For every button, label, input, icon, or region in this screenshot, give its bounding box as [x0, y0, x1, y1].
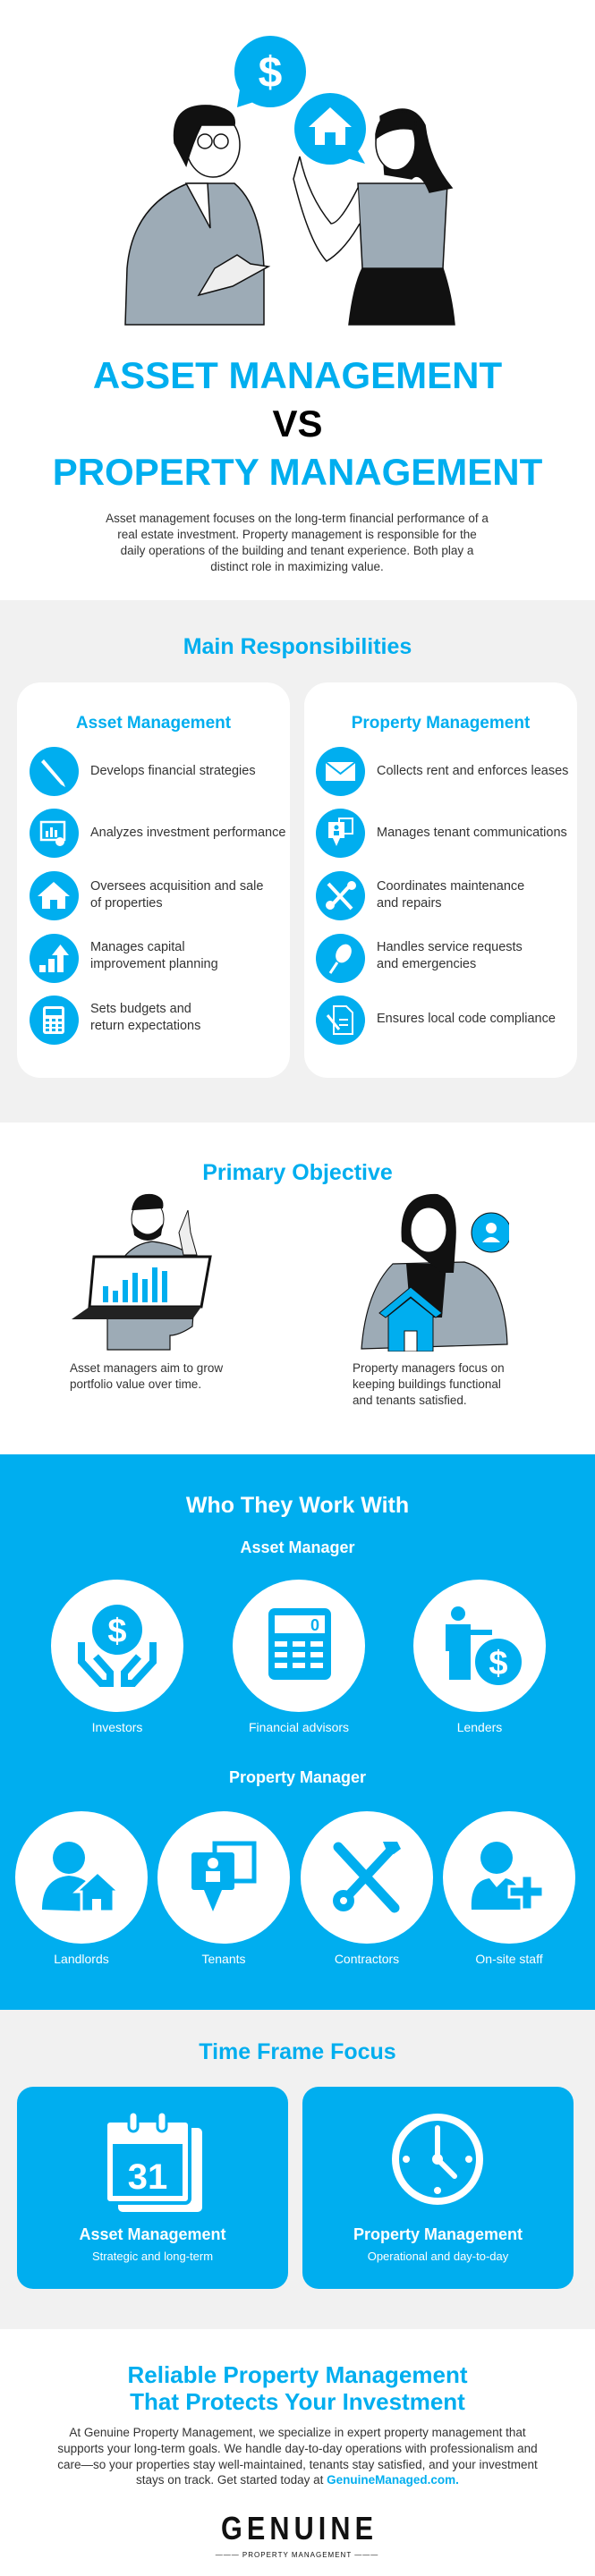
woman — [293, 109, 455, 325]
closing heading: That Protects Your Investment — [130, 2388, 465, 2415]
panel: property management: Ensures local code compliance — [377, 1012, 556, 1026]
man — [125, 106, 268, 325]
icon: tools — [316, 871, 365, 920]
panel: asset management: Sets budgets and — [90, 1002, 191, 1016]
panel: property management: Handles service requests — [377, 940, 523, 954]
panel: asset time frame — [17, 2087, 288, 2289]
icon: house — [30, 871, 79, 920]
icon: investors: $ — [107, 1613, 127, 1650]
panel: asset management: return expectations — [90, 1019, 200, 1033]
icon: dollar bubble — [234, 36, 306, 107]
subheading: property manager: Property Manager — [229, 1768, 366, 1786]
panel: property management: Manages tenant communications — [377, 826, 567, 840]
subheading: asset manager: Asset Manager — [240, 1538, 355, 1556]
icon: calculator: 0 — [310, 1616, 319, 1634]
icon: dollar bubble: $ — [259, 49, 283, 97]
title — [53, 354, 542, 493]
icon: lenders: $ — [489, 1645, 508, 1682]
panel: asset management: Manages capital — [90, 940, 185, 954]
heading: Main Responsibilities — [183, 634, 412, 659]
closing heading — [127, 2361, 467, 2415]
label: Investors — [92, 1720, 142, 1734]
panel: property management: Collects rent and enforces leases — [377, 764, 568, 778]
section: who they work with — [0, 1454, 595, 2010]
panel: property management — [304, 682, 577, 1078]
icon: landlords — [15, 1811, 148, 1944]
icon: calculator — [233, 1580, 365, 1712]
icon: tenants — [157, 1811, 290, 1944]
heading: Time Frame Focus — [199, 2039, 396, 2064]
icon: contractors — [301, 1811, 433, 1944]
hero illustration — [124, 36, 455, 326]
icon: clock — [392, 2114, 483, 2205]
label: Landlords — [54, 1952, 109, 1966]
logo: GENUINE — [221, 2510, 378, 2546]
panel: asset management: Analyzes investment performance — [90, 826, 285, 840]
caption: asset — [70, 1361, 224, 1391]
label: Financial advisors — [249, 1720, 349, 1734]
subtitle: Operational and day-to-day — [368, 2250, 508, 2263]
label: Lenders — [457, 1720, 502, 1734]
closing heading: Reliable Property Management — [127, 2361, 467, 2388]
icon: lenders — [413, 1580, 546, 1712]
caption: property: Property managers focus on — [353, 1361, 505, 1375]
icon: on-site staff — [443, 1811, 575, 1944]
panel: property management: Coordinates maintenance — [377, 879, 524, 894]
icon: investors — [51, 1580, 183, 1712]
subtitle: Strategic and long-term — [92, 2250, 213, 2263]
icon: pen — [30, 747, 79, 796]
section: main responsibilities — [0, 600, 595, 1123]
icon: document — [316, 996, 365, 1045]
caption: property — [353, 1361, 505, 1407]
section: time frame focus — [0, 2010, 595, 2329]
icon: pin — [316, 934, 365, 983]
panel: asset management: Oversees acquisition and sale — [90, 879, 263, 894]
panel: property time frame — [302, 2087, 574, 2289]
panel: asset management: improvement planning — [90, 957, 218, 971]
label: Tenants — [201, 1952, 246, 1966]
illustration: property manager with house — [361, 1193, 509, 1352]
label: On-site staff — [475, 1952, 543, 1966]
heading: Primary Objective — [202, 1160, 393, 1185]
panel: asset management: Develops financial strategies — [90, 764, 256, 778]
icon: calendar — [107, 2113, 202, 2212]
illustration: asset manager with laptop — [72, 1193, 212, 1351]
panel: property management: and repairs — [377, 896, 442, 911]
closing text: At Genuine Property Management, we specialize in expert property management that supports your long-term goals. We handle day-to-day operations with professionalism and care—so your properties stay well-maintained, tenants stay satisfied, and your investment stays on track. Get started today at GenuineManaged.com. — [57, 2426, 538, 2487]
icon: chat — [316, 809, 365, 858]
title: Asset Management — [79, 2225, 226, 2243]
icon: growth — [30, 934, 79, 983]
card heading: Property Management — [352, 714, 530, 733]
icon: calculator — [30, 996, 79, 1045]
caption: property: keeping buildings functional — [353, 1377, 501, 1391]
icon: calendar: 31 — [128, 2157, 167, 2197]
icon: house bubble — [294, 93, 366, 165]
caption: asset: Asset managers aim to grow — [70, 1361, 223, 1375]
icon: chart — [30, 809, 79, 858]
title: PROPERTY MANAGEMENT — [53, 451, 542, 493]
panel: asset management — [17, 682, 290, 1078]
caption: property: and tenants satisfied. — [353, 1394, 467, 1407]
icon: envelope — [316, 747, 365, 796]
title: Property Management — [353, 2225, 523, 2243]
title: ASSET MANAGEMENT — [93, 354, 502, 396]
caption: asset: portfolio value over time. — [70, 1377, 201, 1391]
title: VS — [272, 402, 323, 445]
logo: ——— PROPERTY MANAGEMENT ——— — [216, 2551, 378, 2559]
heading: Who They Work With — [186, 1493, 409, 1518]
card heading: Asset Management — [76, 714, 231, 733]
panel: asset management: of properties — [90, 896, 163, 911]
panel: property management: and emergencies — [377, 957, 476, 971]
section: primary objective — [70, 1160, 509, 1407]
intro text: Asset management focuses on the long-term financial performance of a real estate investment. Property management is responsible for the daily operations of the building and tenant experience. Both play a distinct role in maximizing value. — [106, 512, 489, 573]
label: Contractors — [335, 1952, 399, 1966]
